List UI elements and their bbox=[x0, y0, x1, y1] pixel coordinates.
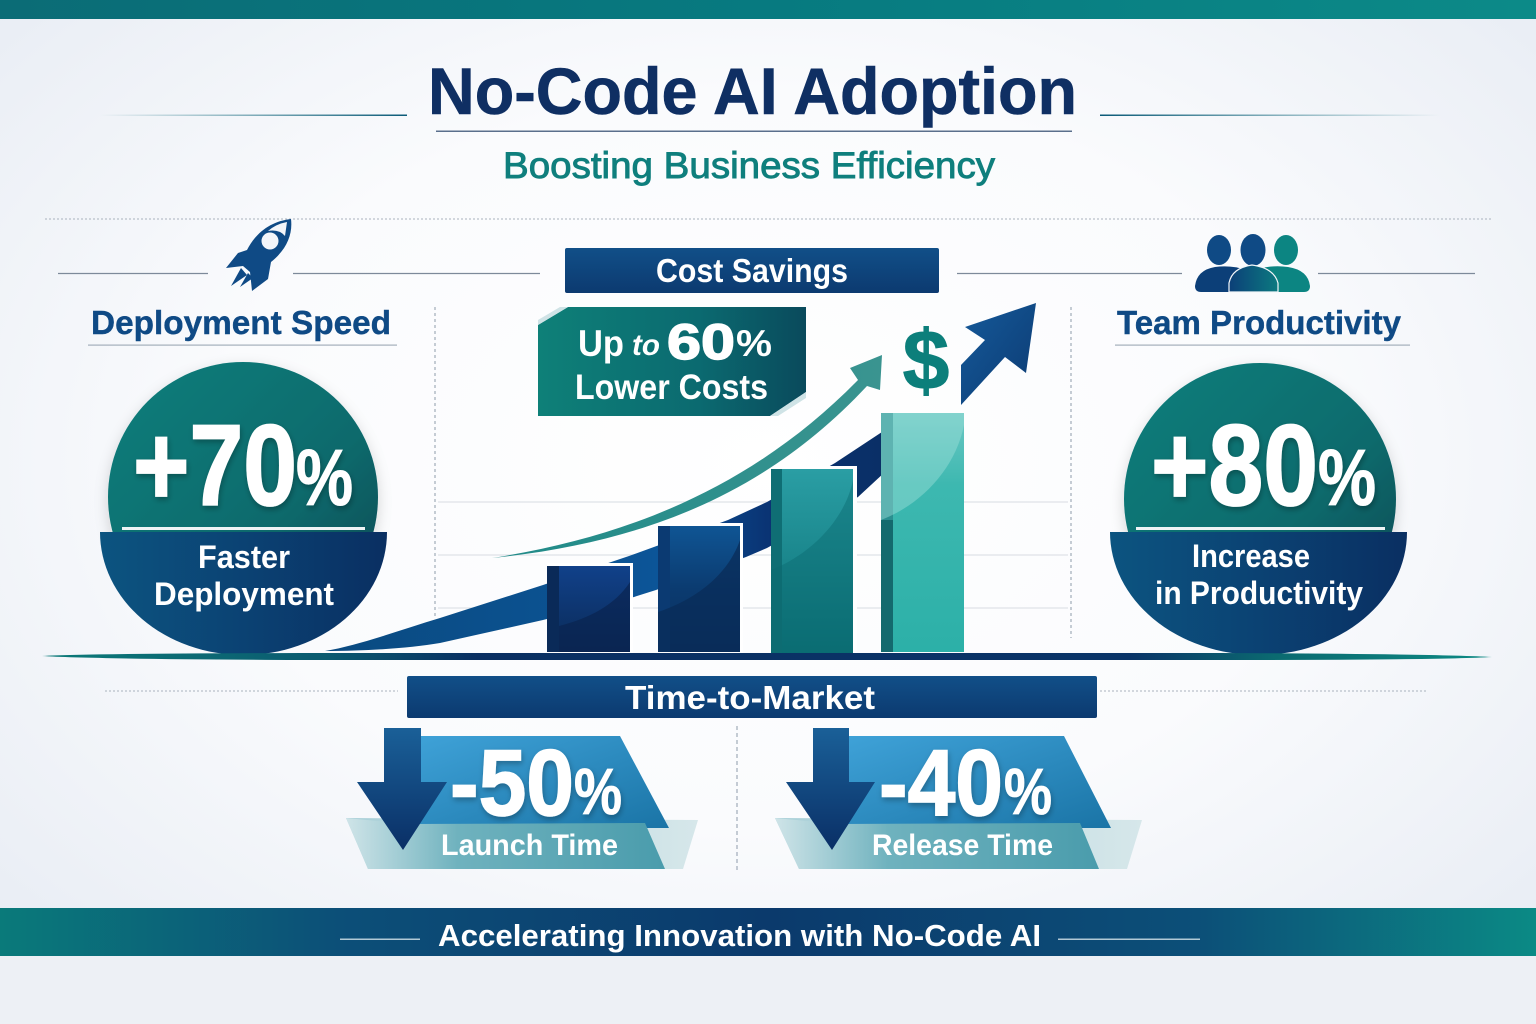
value: -50%: -50 bbox=[450, 730, 574, 835]
callout: Up to 60% Lower Costs: Lower Costs bbox=[575, 368, 768, 407]
arrow: navy growth band bbox=[325, 303, 1036, 651]
title: No-Code AI Adoption bbox=[428, 54, 1077, 128]
caption: Increase in Productivity: in Productivity bbox=[1155, 575, 1363, 611]
callout: Up to 60% Lower Costs: % bbox=[736, 323, 772, 364]
chart: rising cost savings bars and arrows bbox=[325, 303, 1036, 655]
caption: Increase in Productivity: Increase bbox=[1192, 538, 1310, 574]
caption: Increase in Productivity bbox=[1155, 538, 1363, 611]
subtitle: Boosting Business Efficiency bbox=[503, 145, 996, 186]
stat circle: +70% bbox=[100, 362, 387, 655]
value: +70%: % bbox=[296, 433, 353, 522]
icon: down arrow bbox=[786, 728, 875, 850]
baseline bbox=[42, 653, 1492, 660]
value: -40%: % bbox=[1004, 755, 1052, 828]
caption: Release Time: Release Time bbox=[872, 829, 1053, 862]
value: -40%: -40 bbox=[879, 730, 1003, 835]
icon: dollar sign: $ bbox=[903, 313, 949, 407]
value: +80%: % bbox=[1318, 433, 1376, 522]
heading: Deployment Speed: Deployment Speed bbox=[91, 304, 391, 341]
icon: down arrow bbox=[357, 728, 447, 850]
callout: Up to 60% Lower Costs: to bbox=[632, 329, 660, 362]
callout: Up to 60% Lower Costs: Up bbox=[578, 323, 624, 364]
callout: Up to 60% Lower Costs bbox=[538, 307, 806, 416]
bar 3 bbox=[771, 466, 857, 655]
stat: -40% release time bbox=[775, 728, 1142, 869]
stat: -50% launch time bbox=[346, 728, 698, 869]
callout: Up to 60% Lower Costs: 60 bbox=[667, 314, 735, 370]
bar 2 bbox=[658, 523, 743, 654]
banner: Time-to-Market bbox=[407, 676, 1097, 718]
caption: Faster Deployment bbox=[154, 539, 334, 612]
caption: Faster Deployment: Deployment bbox=[154, 576, 334, 612]
value: +70%: +70 bbox=[133, 402, 297, 530]
icon: team bbox=[1195, 234, 1310, 292]
caption: Faster Deployment: Faster bbox=[198, 539, 290, 575]
value: +80%: +80 bbox=[1151, 402, 1318, 530]
banner: Time-to-Market: Time-to-Market bbox=[625, 679, 875, 716]
icon: rocket bbox=[226, 219, 291, 291]
top bar bbox=[0, 0, 1536, 19]
stat circle: +80% bbox=[1110, 363, 1407, 655]
footer band bbox=[0, 908, 1536, 956]
caption: Launch Time: Launch Time bbox=[441, 829, 618, 862]
heading: Team Productivity: Team Productivity bbox=[1117, 304, 1402, 341]
banner: Cost Savings: Cost Savings bbox=[656, 252, 848, 289]
bar 4 bbox=[881, 413, 964, 652]
value: -50%: % bbox=[574, 755, 622, 828]
arrow: teal trend curve bbox=[492, 355, 882, 558]
banner: Cost Savings bbox=[565, 248, 939, 293]
bar 1 bbox=[547, 563, 633, 654]
footer band: Accelerating Innovation with No-Code AI bbox=[438, 918, 1041, 953]
